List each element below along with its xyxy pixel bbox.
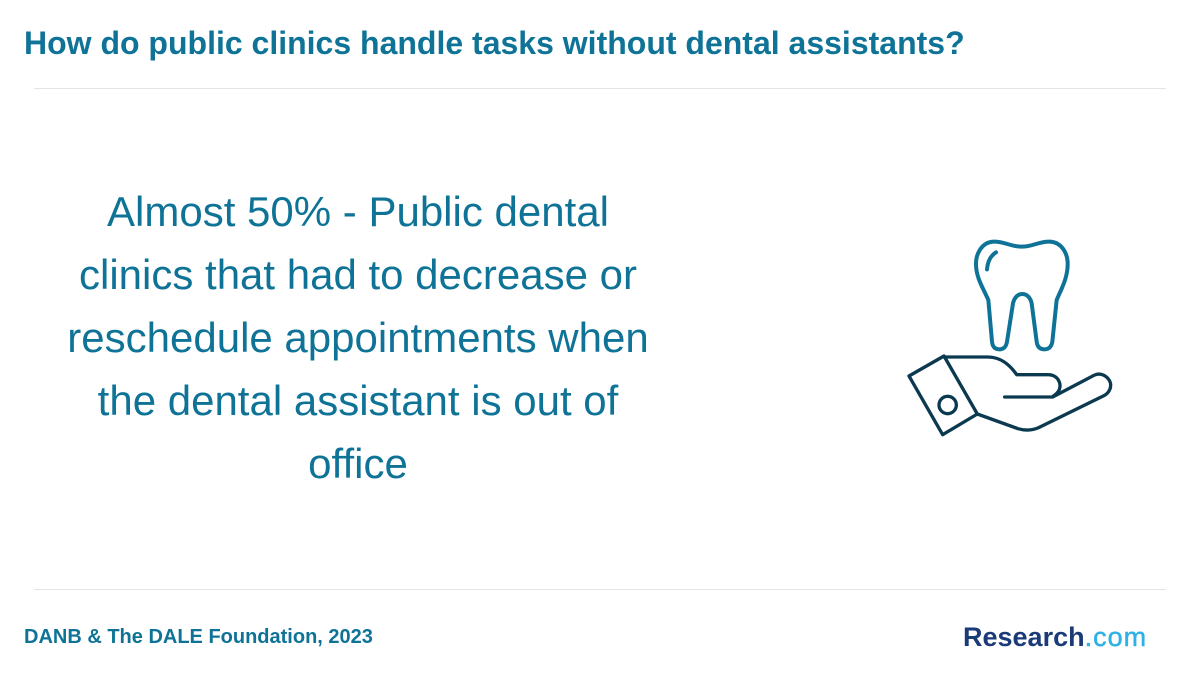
main statement text [67,188,649,487]
source text: DANB & The DALE Foundation, 2023 [24,626,373,648]
main statement text: reschedule appointments when [67,314,649,361]
icon: hand [909,356,1111,435]
logo: Research.com: Research.com [963,622,1147,652]
main statement text: clinics that had to decrease or [79,251,637,298]
main statement text: office [308,440,408,487]
icon: tooth [976,242,1068,349]
icon: tooth in open hand [907,240,1112,436]
main statement text: Almost 50% - Public dental [107,188,609,235]
title: How do public clinics handle tasks without dental assistants? [24,25,965,61]
main statement text: the dental assistant is out of [98,377,618,424]
